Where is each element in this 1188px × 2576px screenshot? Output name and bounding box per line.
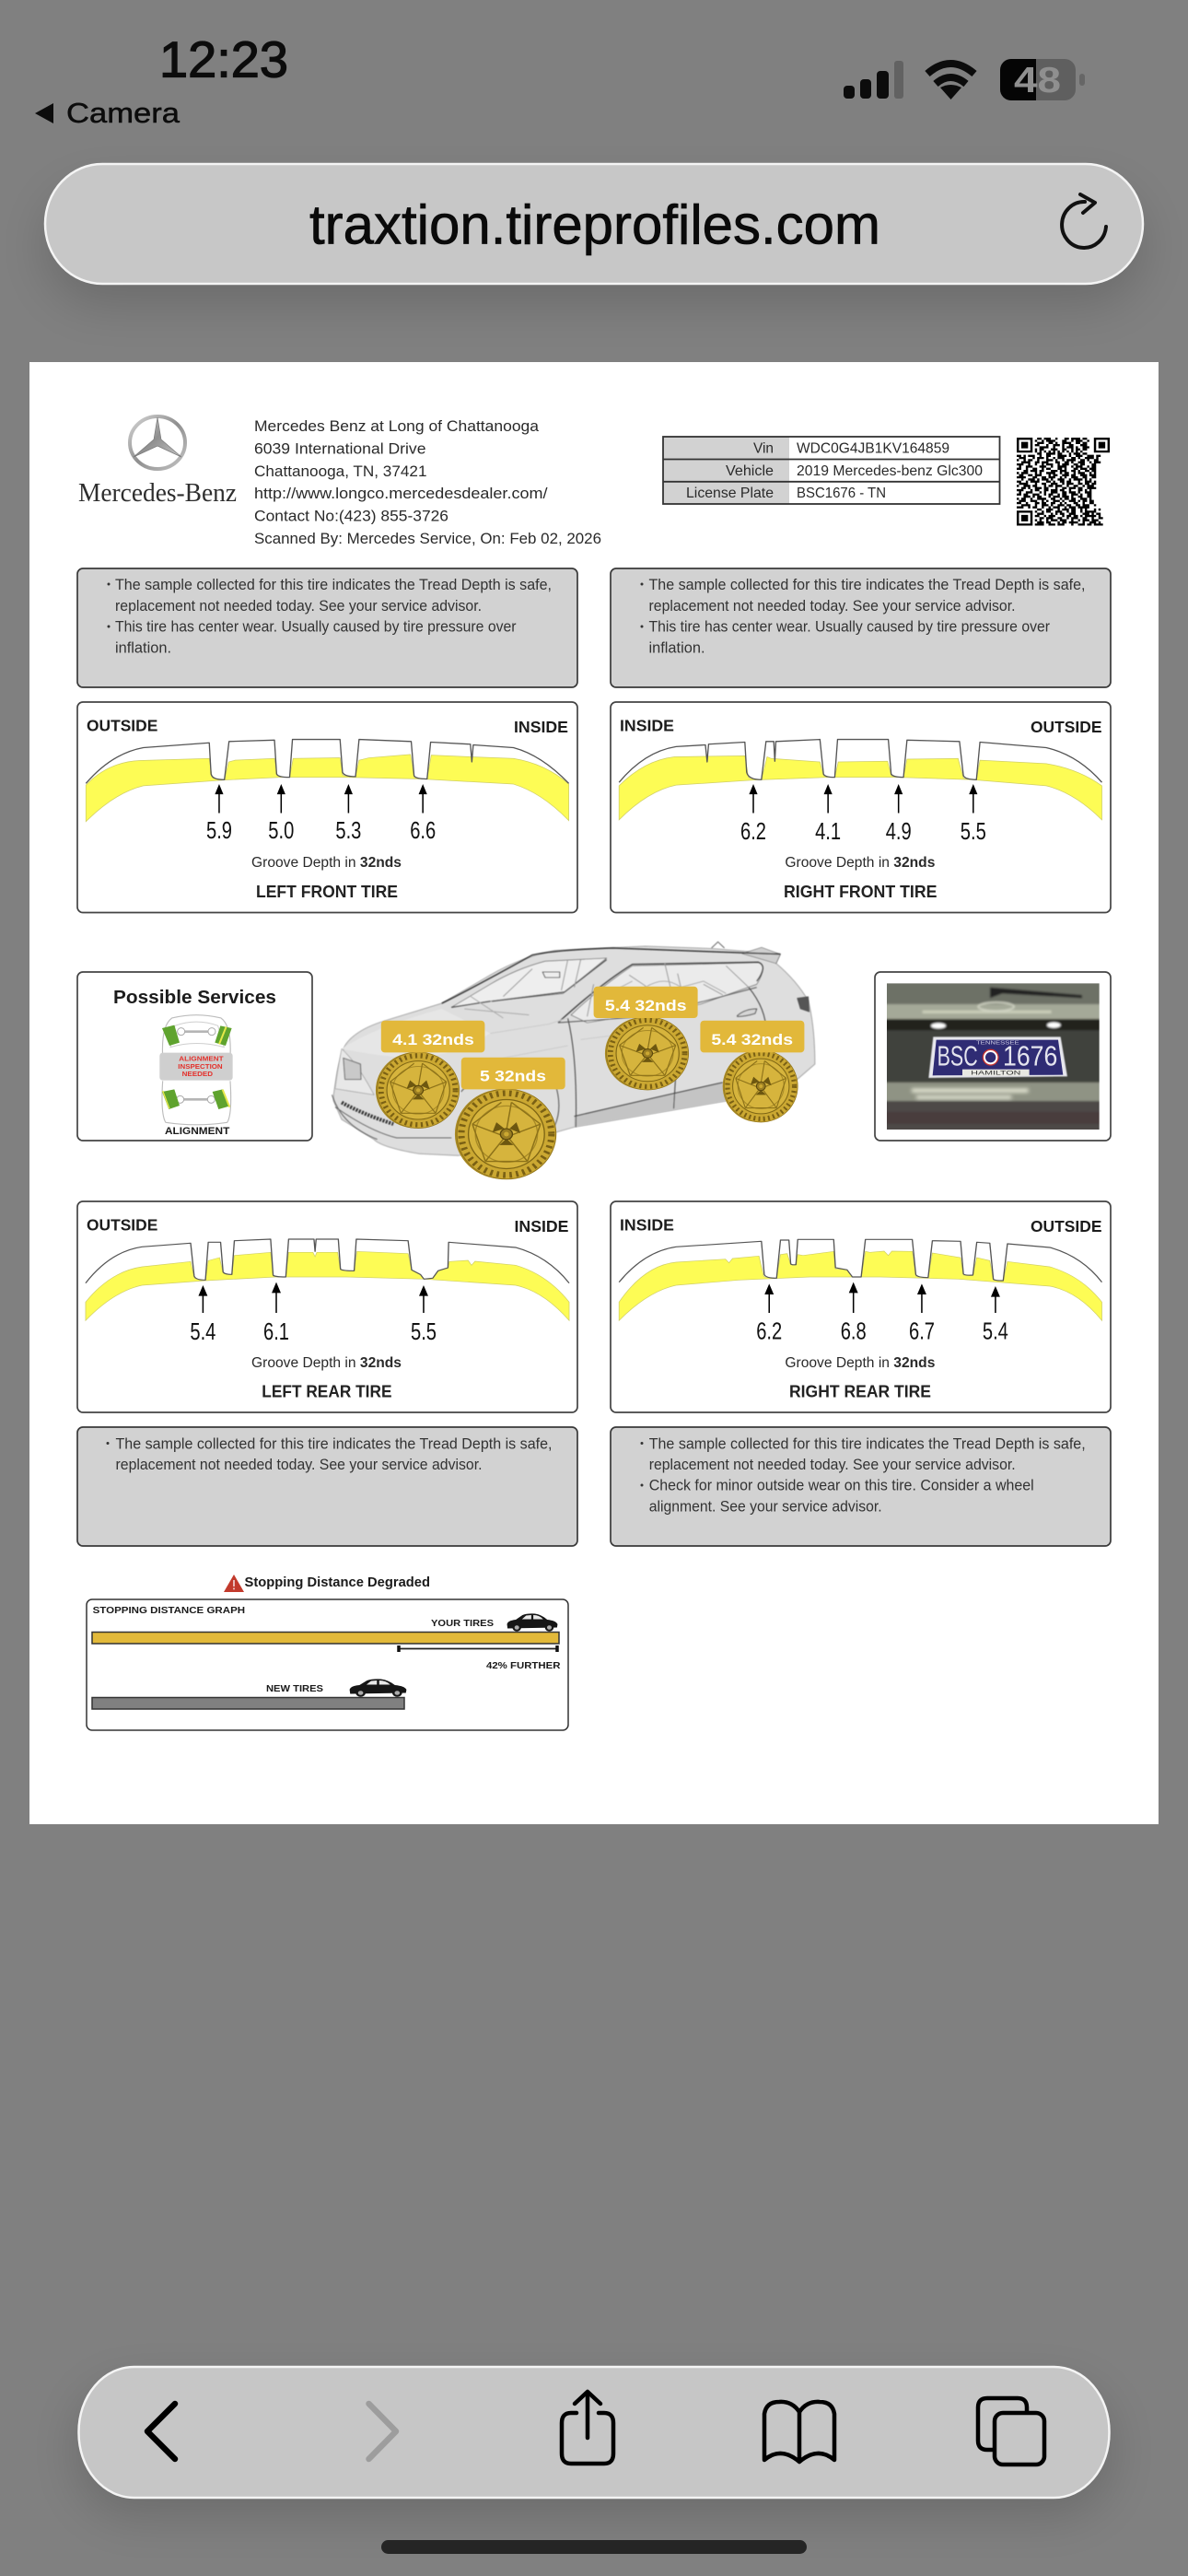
panel: license plate photo: TENNESSEE <box>976 1041 1019 1047</box>
back to camera link: Camera <box>66 97 181 129</box>
tread depth values: 5.4 <box>983 1317 1008 1345</box>
dealer address: Scanned By: Mercedes Service, On: Feb 02, 2026 <box>254 530 601 547</box>
icon: signal strength <box>844 61 903 99</box>
panel: possible services: Possible Services <box>113 987 276 1008</box>
panel: left rear tire advice: The sample collected for this tire indicates the Tread Depth is safe, <box>116 1435 553 1452</box>
panel: left rear tire advice: replacement not needed today. See your service advisor. <box>116 1457 483 1473</box>
car illustration <box>332 942 815 1179</box>
vehicle info table: 2019 Mercedes-benz Glc300 <box>797 463 983 479</box>
panel: left front tire: INSIDE <box>514 718 568 736</box>
panel: right front tire advice <box>611 568 1111 687</box>
dealer address: Contact No:(423) 855-3726 <box>254 507 448 525</box>
tread depth values <box>190 1317 437 1345</box>
tread depth values: 4.9 <box>886 817 912 845</box>
tread depth values: 6.7 <box>909 1317 935 1345</box>
tread depth values: 5.0 <box>268 816 294 844</box>
tread profile chart <box>86 740 569 822</box>
tread depth values: 4.1 <box>815 817 841 845</box>
panel: right rear tire <box>611 1201 1111 1412</box>
tire depth label: 5: 5 32nds <box>480 1068 546 1085</box>
stopping distance graph: YOUR TIRES <box>431 1618 494 1629</box>
panel: license plate photo: HAMILTON <box>971 1070 1021 1076</box>
wheel: left front far <box>376 1052 460 1129</box>
panel: right rear tire: Groove Depth in 32nds <box>785 1355 935 1371</box>
panel: right rear tire: INSIDE <box>620 1216 674 1235</box>
report page <box>29 362 1159 1824</box>
tread depth values: 6.2 <box>756 1317 782 1345</box>
car glass and details <box>332 942 809 1140</box>
panel: left rear tire: OUTSIDE <box>87 1216 157 1235</box>
panel: left front tire advice: This tire has center wear. Usually caused by tire pressure over <box>115 619 517 636</box>
panel: license plate photo <box>875 972 1111 1141</box>
vehicle info table: Vin <box>753 440 774 457</box>
vehicle info table: BSC1676 - TN <box>797 486 886 501</box>
clock time: 12:23 <box>159 31 288 88</box>
tread profile chart <box>619 1239 1101 1320</box>
icon: car your tires <box>507 1613 557 1632</box>
tire depth label: 5.4 far <box>594 987 698 1018</box>
icon: battery 48 percent <box>1000 59 1085 100</box>
panel: left front tire: LEFT FRONT TIRE <box>256 883 398 901</box>
icon: wifi <box>927 64 974 100</box>
tread depth values: 6.1 <box>263 1317 289 1345</box>
vehicle info table: Vehicle <box>726 463 774 479</box>
tire depth label: 5.4 far: 5.4 32nds <box>605 997 687 1014</box>
tread depth values: 6.8 <box>841 1317 867 1345</box>
tread depth values <box>740 817 986 845</box>
icon: reload <box>1062 194 1106 248</box>
panel: left front tire advice: inflation. <box>115 639 171 656</box>
icon: back chevron <box>147 2404 175 2459</box>
panel: right front tire <box>611 702 1111 912</box>
wheel: front near <box>455 1089 556 1179</box>
tread depth values <box>206 816 436 844</box>
toolbar shadow <box>78 2386 1110 2515</box>
panel: right front tire: OUTSIDE <box>1031 718 1101 736</box>
tread depth values: 5.5 <box>411 1317 437 1345</box>
tread depth values: 6.2 <box>740 817 766 845</box>
further distance bracket <box>399 1645 557 1652</box>
panel: right front tire advice: The sample collected for this tire indicates the Tread Depth is safe, <box>648 577 1085 593</box>
tire depth label: 4.1: 4.1 32nds <box>392 1031 474 1048</box>
stopping distance graph <box>87 1599 568 1730</box>
QR code <box>1017 438 1110 526</box>
tire depth label: 5.4 near <box>700 1021 804 1052</box>
dealer address: 6039 International Drive <box>254 440 425 457</box>
tread depth values: 5.3 <box>335 816 361 844</box>
panel: right rear tire advice: replacement not needed today. See your service advisor. <box>649 1457 1016 1473</box>
stopping distance graph: NEW TIRES <box>266 1683 323 1694</box>
tread depth values <box>756 1317 1008 1345</box>
wheel: rear near <box>723 1050 798 1122</box>
stopping distance heading: Stopping Distance Degraded <box>245 1575 430 1590</box>
icon: car new tires <box>350 1679 406 1697</box>
tread depth values: 5.4 <box>190 1317 215 1345</box>
panel: right front tire: Groove Depth in 32nds <box>785 855 935 871</box>
icon: warning triangle <box>224 1575 244 1592</box>
panel: left rear tire: INSIDE <box>514 1217 569 1235</box>
panel: right front tire advice: This tire has center wear. Usually caused by tire pressure over <box>648 619 1050 636</box>
panel: left front tire advice: replacement not needed today. See your service advisor. <box>115 598 482 615</box>
icon: tabs <box>978 2398 1044 2465</box>
bar: your tires <box>92 1633 559 1644</box>
alignment diagram: INSPECTION <box>178 1064 223 1071</box>
panel: right rear tire: RIGHT REAR TIRE <box>789 1383 931 1401</box>
dealer address: Mercedes Benz at Long of Chattanooga <box>254 417 540 435</box>
panel: left front tire advice <box>77 568 577 687</box>
panel: right front tire: INSIDE <box>620 717 674 735</box>
panel: left rear tire: Groove Depth in 32nds <box>251 1355 402 1371</box>
icon: battery 48 percent: 48 <box>1014 61 1061 100</box>
panel: right rear tire: OUTSIDE <box>1031 1217 1101 1235</box>
wheel: rear far <box>605 1017 689 1090</box>
tread profile chart <box>86 1239 569 1320</box>
panel: left rear tire advice <box>77 1427 577 1546</box>
panel: license plate photo: 1676 <box>1003 1041 1057 1072</box>
panel: left front tire <box>77 702 577 912</box>
status bar <box>35 31 1085 129</box>
dealer address: Chattanooga, TN, 37421 <box>254 463 427 480</box>
tread depth values: 5.9 <box>206 816 232 844</box>
url text: traxtion.tireprofiles.com <box>309 193 880 256</box>
panel: right front tire advice: inflation. <box>648 639 705 656</box>
tread depth values: 6.6 <box>410 816 436 844</box>
back to camera link <box>35 97 181 129</box>
tread profile chart <box>619 740 1101 820</box>
dealer logo: Mercedes-Benz <box>78 479 237 508</box>
panel: right front tire: RIGHT FRONT TIRE <box>784 883 938 901</box>
panel: right rear tire advice <box>611 1427 1111 1546</box>
dealer address: http://www.longco.mercedesdealer.com/ <box>254 485 548 502</box>
vehicle info table: License Plate <box>686 486 774 501</box>
tire depth label: 5.4 near: 5.4 32nds <box>711 1031 793 1048</box>
panel: license plate photo: BSC <box>938 1041 978 1072</box>
tire depth label: 4.1 <box>381 1021 484 1052</box>
alignment diagram <box>159 1015 233 1137</box>
car body <box>333 946 815 1155</box>
dealer address <box>254 417 601 547</box>
address bar <box>45 164 1143 284</box>
icon: three-pointed star <box>130 416 185 469</box>
icon: forward chevron <box>368 2404 396 2459</box>
tire depth label: 5 <box>461 1058 565 1089</box>
icon: bookmarks book <box>764 2402 834 2462</box>
tread depth values: 5.5 <box>961 817 986 845</box>
panel: left front tire: Groove Depth in 32nds <box>251 855 402 871</box>
vehicle info table <box>663 437 1000 504</box>
panel: left rear tire: LEFT REAR TIRE <box>262 1383 392 1401</box>
icon: share <box>562 2392 613 2464</box>
panel: right rear tire advice: The sample collected for this tire indicates the Tread Depth is safe, <box>649 1435 1086 1452</box>
address bar shadow <box>46 189 1142 304</box>
panel: left front tire: OUTSIDE <box>87 717 157 735</box>
panel: left rear tire <box>77 1201 577 1412</box>
panel: right front tire advice: replacement not needed today. See your service advisor. <box>648 598 1015 615</box>
stopping distance graph: STOPPING DISTANCE GRAPH <box>93 1605 245 1616</box>
dealer logo <box>78 416 237 508</box>
panel: possible services <box>77 972 312 1141</box>
panel: right rear tire advice: alignment. See your service advisor. <box>649 1499 882 1516</box>
alignment diagram: NEEDED <box>182 1071 213 1078</box>
alignment diagram: ALIGNMENT <box>179 1057 225 1063</box>
home indicator <box>381 2540 807 2554</box>
bar: new tires <box>92 1697 404 1709</box>
panel: right rear tire advice: Check for minor outside wear on this tire. Consider a wheel <box>649 1478 1034 1494</box>
browser toolbar <box>79 2367 1109 2498</box>
panel: left front tire advice: The sample collected for this tire indicates the Tread Depth is safe, <box>115 577 552 593</box>
alignment diagram: ALIGNMENT <box>165 1126 230 1137</box>
vehicle info table: WDC0G4JB1KV164859 <box>797 440 949 457</box>
stopping distance graph: 42% FURTHER <box>486 1660 561 1671</box>
